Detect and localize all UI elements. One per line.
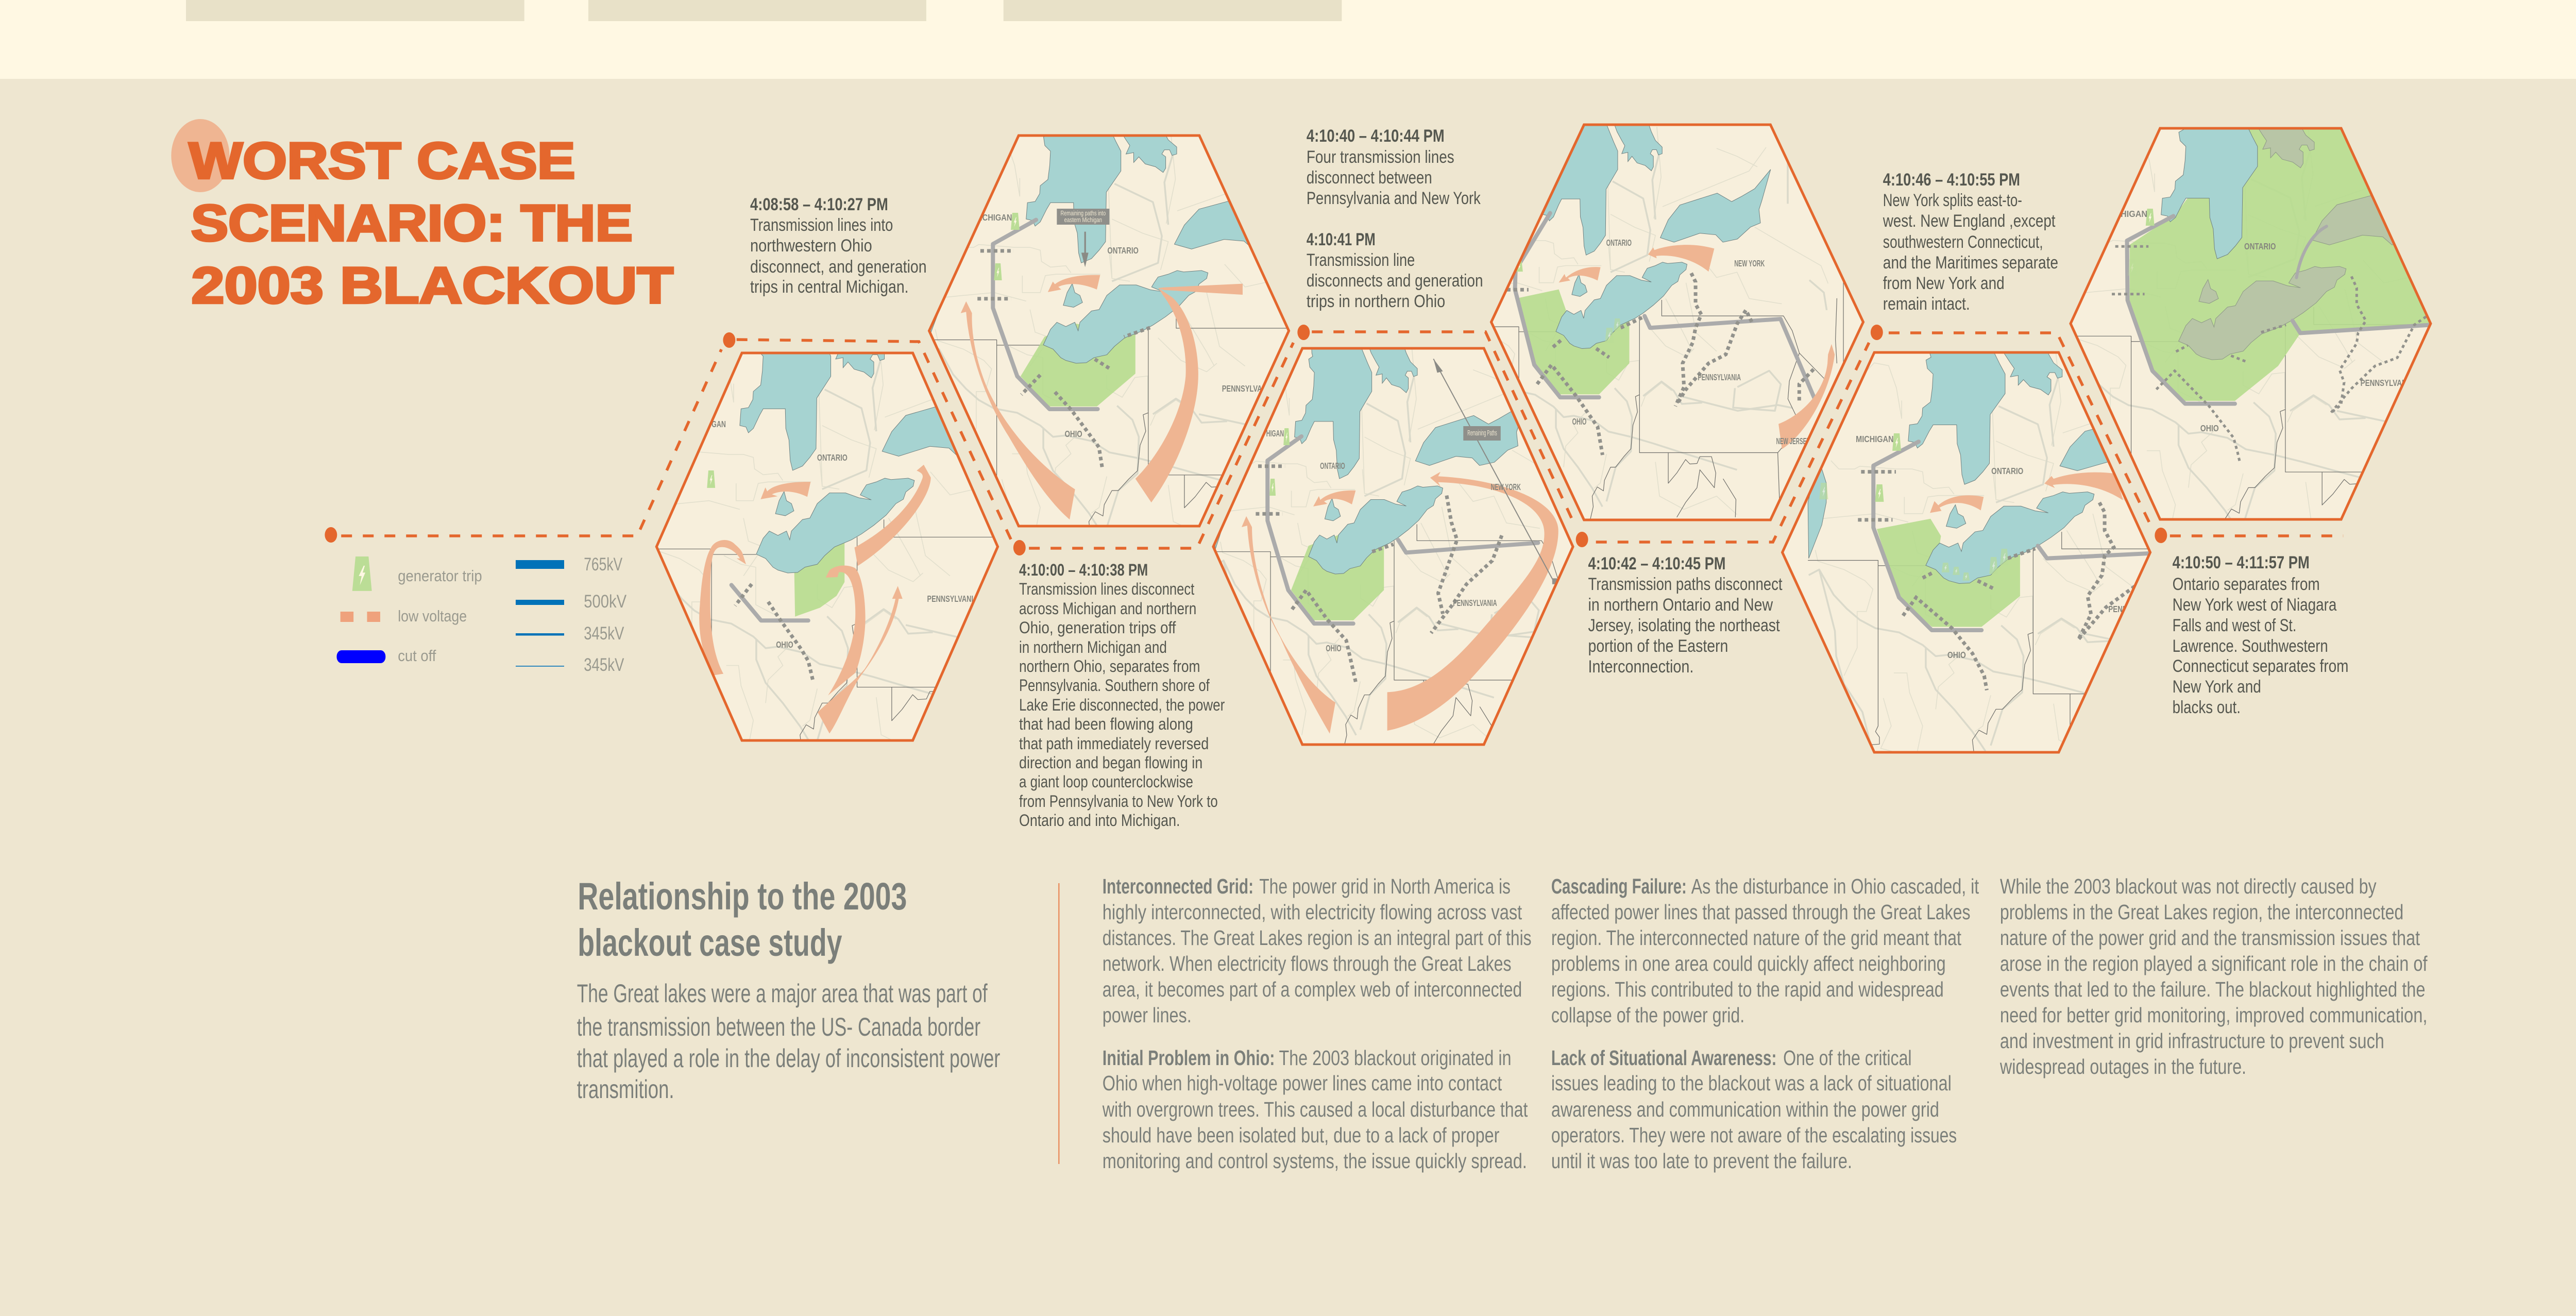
caption: 4:10:00 – 4:10:38 PM: from Pennsylvania to New York to [1019,792,1218,811]
caption: 4:10:46 – 4:10:55 PM: west. New England ,except [1883,211,2056,231]
heading: relationship to the 2003 blackout case study: Relationship to the 2003 [578,875,907,918]
caption: 4:10:46 – 4:10:55 PM: from New York and [1883,273,2005,293]
legend label: low voltage: low voltage [398,607,467,625]
caption: 4:10:50 – 4:11:57 PM: Ontario separates from [2173,574,2320,594]
caption: 4:10:40 – 4:10:44 PM and 4:10:41 PM: 4:10:40 – 4:10:44 PM [1307,126,1445,146]
caption: 4:10:42 – 4:10:45 PM: in northern Ontario and New [1588,595,1773,615]
caption: 4:10:42 – 4:10:45 PM: Jersey, isolating the northeast [1588,615,1780,635]
icon: cut off [336,650,385,663]
text block: initial problem in Ohio: Initial Problem in Ohio: [1103,1045,1275,1070]
panel: map 3 hexagon: ONTARIO [1320,461,1345,471]
text block: interconnected grid: The power grid in North America is [1259,874,1511,898]
caption: 4:08:58 – 4:10:27 PM: Transmission lines into [750,215,893,235]
title accent circle [171,119,229,192]
panel: map 6 hexagon: HIGAN [2121,209,2147,219]
text block: cascading failure: collapse of the power grid. [1551,1003,1744,1027]
caption: 4:10:00 – 4:10:38 PM: Ohio, generation trips off [1019,619,1176,637]
text block: intro paragraph: the transmission between the US- Canada border [577,1013,980,1041]
legend label: cut off: cut off [398,647,436,665]
icon: generator trip [352,556,372,591]
text block: interconnected grid: network. When electricity flows through the Great Lakes [1103,951,1512,975]
text block: intro paragraph: transmition. [577,1075,674,1104]
caption: 4:10:42 – 4:10:45 PM: Transmission paths disconnect [1588,574,1783,594]
top band [0,0,2576,79]
text block: lack of situational awareness: Lack of Situational Awareness: [1551,1045,1776,1070]
caption: 4:10:40 – 4:10:44 PM and 4:10:41 PM: Pennsylvania and New York [1307,188,1481,208]
caption: 4:10:50 – 4:11:57 PM [2173,552,2348,717]
panel: map 3 hexagon [1212,347,1574,746]
text block: cascading failure: As the disturbance in Ohio cascaded, it [1691,874,1979,898]
title: 2003 BLACKOUT [191,257,673,314]
label: 345kV: 345kV [584,623,624,644]
panel: map 1 hexagon: GAN [711,419,726,429]
caption: 4:10:00 – 4:10:38 PM: Ontario and into Michigan. [1019,812,1180,830]
caption: 4:10:00 – 4:10:38 PM: 4:10:00 – 4:10:38 PM [1019,561,1148,580]
panel: map 5 hexagon: ONTARIO [1991,466,2023,476]
text block: initial problem in Ohio [1102,1045,1528,1173]
caption: 4:10:46 – 4:10:55 PM: southwestern Connecticut, [1883,232,2043,252]
caption: 4:10:50 – 4:11:57 PM: Connecticut separates from [2173,656,2348,676]
caption: 4:10:00 – 4:10:38 PM: across Michigan and northern [1019,600,1196,618]
caption: 4:10:00 – 4:10:38 PM: that had been flowing along [1019,715,1193,734]
panel: map 1 hexagon: ONTARIO [817,453,848,463]
text block: intro paragraph [577,979,1000,1104]
caption: 4:10:40 – 4:10:44 PM and 4:10:41 PM: trips in northern Ohio [1307,291,1445,311]
panel: map 4 hexagon: NEW YORK [1734,259,1765,268]
text block: conclusion: nature of the power grid and the transmission issues that [2000,925,2420,950]
caption: 4:10:00 – 4:10:38 PM: a giant loop counterclockwise [1019,773,1193,791]
text block: conclusion: and investment in grid infrastructure to prevent such [2000,1028,2384,1053]
text block: intro paragraph: The Great lakes were a major area that was part of [577,979,988,1008]
panel: map 4 hexagon: OHIO [1572,417,1586,427]
text block: conclusion: While the 2003 blackout was not directly caused by [2000,874,2377,898]
text block: cascading failure: Cascading Failure: [1551,874,1687,898]
icon: low voltage [341,612,380,622]
line sample: 765kV [516,560,564,569]
caption: 4:10:40 – 4:10:44 PM and 4:10:41 PM: disconnects and generation [1307,271,1483,291]
panel: map 2 hexagon: ONTARIO [1107,246,1139,256]
caption: 4:10:50 – 4:11:57 PM: New York west of Niagara [2173,595,2337,615]
text block: initial problem in Ohio: The 2003 blackout originated in [1279,1045,1512,1070]
panel: map 3 hexagon: HIGAN [1266,429,1284,438]
caption: 4:10:50 – 4:11:57 PM: blacks out. [2173,697,2241,717]
caption: 4:10:50 – 4:11:57 PM: Lawrence. Southwestern [2173,636,2328,656]
text block: lack of situational awareness: One of the critical [1783,1045,1912,1070]
panel: map 6 hexagon [2069,127,2432,520]
caption: 4:08:58 – 4:10:27 PM: trips in central Michigan. [750,277,909,297]
legend [336,554,626,675]
caption: 4:10:00 – 4:10:38 PM: northern Ohio, separates from [1019,657,1200,676]
caption: 4:10:00 – 4:10:38 PM: in northern Michigan and [1019,638,1167,657]
panel: map 2 hexagon [927,134,1290,528]
text block: intro paragraph: that played a role in the delay of inconsistent power [577,1044,1000,1073]
legend label: generator trip: generator trip [398,567,482,585]
text block: conclusion: widespread outages in the future. [1999,1054,2246,1078]
panel: map 3 hexagon: NEW YORK [1491,482,1521,492]
text block: cascading failure: region. The interconnected nature of the grid meant that [1551,925,1962,950]
text block: interconnected grid: area, it becomes part of a complex web of interconnected [1103,977,1522,1001]
caption: 4:10:00 – 4:10:38 PM [1019,561,1225,830]
caption: 4:10:42 – 4:10:45 PM [1588,553,1783,677]
caption: 4:10:50 – 4:11:57 PM: Falls and west of St. [2173,615,2296,635]
caption: 4:10:00 – 4:10:38 PM: direction and began flowing in [1019,754,1202,772]
panel: map 4 hexagon [1464,114,1863,520]
caption: 4:10:42 – 4:10:45 PM: portion of the Eastern [1588,636,1728,656]
text block: interconnected grid: highly interconnected, with electricity flowing across vast [1103,900,1522,924]
caption: 4:10:42 – 4:10:45 PM: Interconnection. [1588,656,1693,677]
text block: conclusion: events that led to the failure. The blackout highlighted the [2000,977,2426,1001]
text block: cascading failure: affected power lines that passed through the Great Lakes [1551,900,1971,924]
text block: lack of situational awareness: issues leading to the blackout was a lack of situational [1551,1071,1952,1095]
caption: 4:10:46 – 4:10:55 PM: remain intact. [1883,294,1970,314]
line sample: 345kV [516,633,564,636]
panel: map 1 hexagon: OHIO [776,640,793,650]
title [189,132,673,314]
callout: remaining paths [1463,426,1501,441]
text block: interconnected grid [1103,874,1532,1027]
caption: 4:10:46 – 4:10:55 PM: New York splits east-to- [1883,190,2022,210]
panel: map 5 hexagon: OHIO [1947,650,1966,660]
text block: cascading failure: problems in one area could quickly affect neighboring [1551,951,1946,975]
callout: remaining paths into eastern Michigan: eastern Michigan [1064,216,1102,224]
caption: 4:10:46 – 4:10:55 PM [1883,170,2058,314]
caption: 4:10:00 – 4:10:38 PM: Pennsylvania. Southern shore of [1019,677,1210,695]
text block: interconnected grid: distances. The Great Lakes region is an integral part of this [1103,925,1532,950]
text block: initial problem in Ohio: monitoring and control systems, the issue quickly spread. [1103,1149,1527,1173]
panel: map 6 hexagon: OHIO [2200,424,2219,433]
text block: conclusion: need for better grid monitoring, improved communication, [2000,1003,2428,1027]
panel: map 5 hexagon [1781,351,2151,753]
panel: map 4 hexagon: NEW JERSEY [1776,436,1810,446]
caption: 4:08:58 – 4:10:27 PM: disconnect, and generation [750,257,927,277]
caption: 4:10:40 – 4:10:44 PM and 4:10:41 PM: Four transmission lines [1307,147,1454,167]
text block: conclusion: arose in the region played a significant role in the chain of [2000,951,2428,975]
caption: 4:10:00 – 4:10:38 PM: Transmission lines disconnect [1019,580,1194,599]
caption: 4:10:40 – 4:10:44 PM and 4:10:41 PM: disconnect between [1307,167,1432,188]
text block: cascading failure [1551,874,1979,1027]
caption: 4:10:46 – 4:10:55 PM: 4:10:46 – 4:10:55 PM [1883,170,2020,190]
caption: 4:10:46 – 4:10:55 PM: and the Maritimes separate [1883,252,2058,273]
panel: map 6 hexagon: ONTARIO [2244,242,2276,251]
line sample: 500kV [516,600,564,605]
text block: interconnected grid: Interconnected Grid: [1103,874,1253,898]
text block: conclusion [1999,874,2428,1078]
panel: map 4 hexagon: ONTARIO [1606,238,1632,248]
caption: 4:10:50 – 4:11:57 PM: 4:10:50 – 4:11:57 PM [2173,552,2310,572]
caption: 4:10:50 – 4:11:57 PM: New York and [2173,677,2261,697]
panel: map 2 hexagon: MICHIGAN [974,213,1012,223]
caption: 4:10:00 – 4:10:38 PM: Lake Erie disconnected, the power [1019,696,1225,715]
panel: map 4 hexagon: PENNSYLVANIA [1698,373,1741,382]
text block: initial problem in Ohio: with overgrown trees. This caused a local disturbance that [1102,1097,1528,1121]
panel: map 1 hexagon: PENNSYLVANIA [927,594,978,604]
text block: lack of situational awareness [1551,1045,1957,1173]
text block: cascading failure: regions. This contributed to the rapid and widespread [1551,977,1944,1001]
caption: 4:08:58 – 4:10:27 PM [750,194,927,297]
callout: remaining paths into eastern Michigan [1057,209,1109,225]
text block: conclusion: problems in the Great Lakes region, the interconnected [2000,900,2403,924]
panel: map 2 hexagon: PENNSYLVANIA [1222,384,1274,394]
title: WORST CASE [189,132,575,189]
heading: relationship to the 2003 blackout case study: blackout case study [578,922,842,965]
caption: 4:10:42 – 4:10:45 PM: 4:10:42 – 4:10:45 PM [1588,553,1726,573]
text block: interconnected grid: power lines. [1103,1003,1192,1027]
text block: lack of situational awareness: operators. They were not aware of the escalating issues [1551,1123,1957,1147]
panel: map 3 hexagon: PENNSYLVANIA [1453,598,1497,608]
caption: 4:10:00 – 4:10:38 PM: that path immediately reversed [1019,735,1209,753]
panel: map 5 hexagon: PENNSYLVANIA [2108,604,2162,614]
dashed timeline connector [325,325,2343,555]
callout: remaining paths: Remaining Paths [1467,429,1497,437]
heading: relationship to the 2003 blackout case study [578,875,907,965]
callout: remaining paths into eastern Michigan: Remaining paths into [1060,210,1106,217]
caption: 4:10:40 – 4:10:44 PM and 4:10:41 PM: 4:10:41 PM [1307,229,1376,249]
panel: map 1 hexagon [655,351,999,742]
label: 500kV: 500kV [584,591,626,612]
panel: map 3 hexagon: OHIO [1326,644,1342,653]
caption: 4:08:58 – 4:10:27 PM: 4:08:58 – 4:10:27 PM [750,194,888,214]
panel: map 6 hexagon: PENNSYLVANIA [2361,378,2414,388]
text block: initial problem in Ohio: should have been isolated but, due to a lack of proper [1103,1123,1499,1147]
line sample: 345kV thin [516,666,564,667]
text block: initial problem in Ohio: Ohio when high-voltage power lines came into contact [1103,1071,1502,1095]
label: 345kV thin: 345kV [584,654,624,675]
text block: lack of situational awareness: until it was too late to prevent the failure. [1551,1149,1852,1173]
title: SCENARIO: THE [191,194,633,251]
divider [1058,883,1060,1164]
panel: map 2 hexagon: OHIO [1064,429,1082,439]
caption: 4:08:58 – 4:10:27 PM: northwestern Ohio [750,235,872,256]
label: 765kV: 765kV [584,554,622,575]
caption: 4:10:40 – 4:10:44 PM and 4:10:41 PM [1307,126,1483,311]
text block: lack of situational awareness: awareness and communication within the power grid [1551,1097,1939,1121]
caption: 4:10:40 – 4:10:44 PM and 4:10:41 PM: Transmission line [1307,250,1415,270]
panel: map 5 hexagon: MICHIGAN [1856,434,1893,444]
